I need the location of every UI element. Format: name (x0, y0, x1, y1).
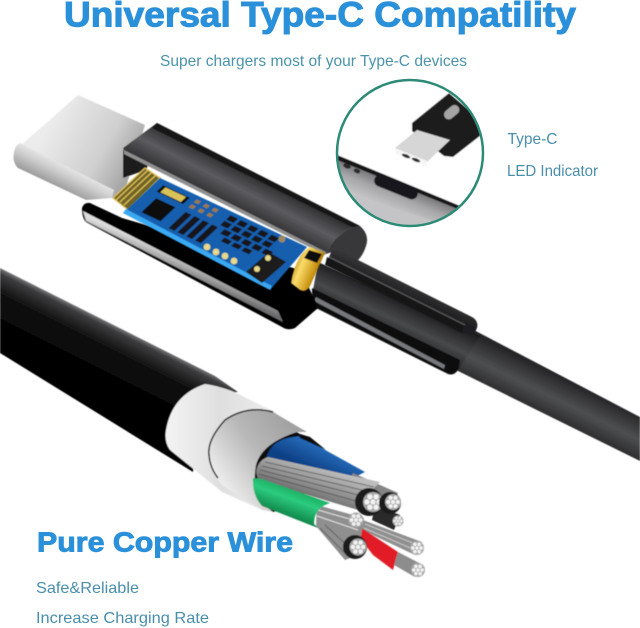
bottom strand (394, 552, 423, 577)
connector strip (158, 186, 188, 203)
upper strain relief ridge (327, 250, 477, 334)
thin cable with strain relief (312, 262, 640, 461)
short dark strand (372, 505, 400, 530)
phone edge (338, 160, 456, 222)
black plug body (412, 93, 490, 157)
lower channel (312, 288, 460, 374)
red wire (360, 527, 398, 570)
circuit board (123, 178, 307, 290)
inset label: Type-C: Type-C (508, 131, 558, 148)
gold fingers (113, 168, 160, 210)
metal plug (395, 130, 450, 162)
lower stranded conductor (316, 505, 364, 560)
shield layer (209, 410, 307, 512)
feature: Safe&Reliable: Safe&Reliable (36, 580, 139, 597)
lower rail highlight (314, 297, 445, 369)
back strand (345, 473, 398, 512)
main chip (141, 198, 175, 221)
solder dots (204, 244, 237, 264)
inner shell shadow (123, 150, 150, 178)
open connector housing (14, 95, 477, 334)
cable core opening (255, 432, 320, 512)
lower tray (82, 203, 318, 329)
tube (312, 262, 480, 370)
white insulation layer (166, 384, 277, 510)
upper metal shell (123, 123, 360, 254)
component grid (209, 215, 285, 261)
dark terminal block (246, 252, 286, 283)
inset label: LED Indicator: LED Indicator (507, 163, 599, 180)
large cut cable (0, 268, 425, 577)
shell end cap (326, 226, 367, 262)
right strand (362, 520, 422, 555)
board components (136, 185, 285, 269)
heading: Pure Copper Wire: Pure Copper Wire (37, 526, 293, 558)
wire end caps (343, 488, 425, 577)
charging port (374, 175, 418, 200)
USB-C silver plug (14, 95, 145, 200)
inset circle: Type-C detail (336, 78, 484, 228)
blue wire (266, 436, 365, 478)
subtitle: Super chargers most of your Type-C devices (160, 53, 467, 70)
feature: Increase Charging Rate: Increase Charging Rate (36, 610, 209, 627)
tray rim highlight (83, 211, 283, 322)
circle border (337, 80, 483, 226)
resistor bars (169, 212, 218, 243)
black jacket (0, 268, 238, 472)
main stranded conductor (256, 457, 380, 510)
gold ring (291, 247, 325, 291)
cable tail (452, 328, 640, 461)
small pads (189, 199, 219, 217)
green wire (253, 478, 330, 528)
LED pill (443, 104, 460, 120)
